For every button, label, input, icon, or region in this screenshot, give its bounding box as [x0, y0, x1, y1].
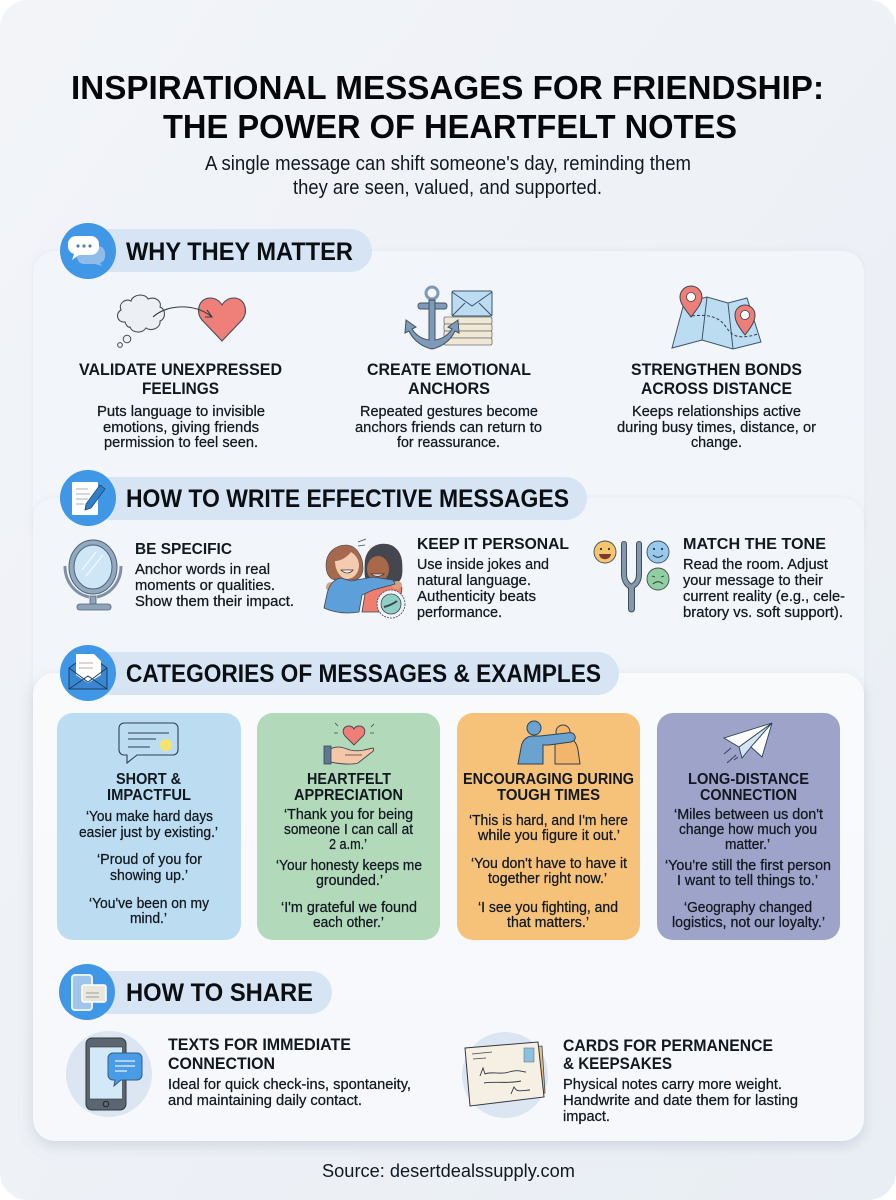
- card: heartfelt appreciation: APPRECIATION: [294, 787, 403, 804]
- card: long-distance connection: change how much you: [679, 822, 817, 838]
- column: validate unexpressed feelings: emotions, giving friends: [103, 420, 259, 436]
- title: THE POWER OF HEARTFELT NOTES: [163, 108, 737, 145]
- card: heartfelt appreciation: ‘Thank you for being: [284, 807, 413, 823]
- card: long-distance connection: I want to tell things to.’: [677, 873, 818, 889]
- share option: texts: CONNECTION: [168, 1054, 275, 1073]
- tip: be specific: Anchor words in real: [135, 562, 270, 578]
- card: heartfelt appreciation: someone I can call at: [284, 822, 413, 838]
- tip: keep it personal: KEEP IT PERSONAL: [417, 536, 569, 553]
- tip: match the tone: [594, 536, 845, 621]
- panel: why they matter: [33, 251, 864, 551]
- tip: match the tone: Read the room. Adjust: [683, 557, 828, 573]
- icon: message bubble: [119, 723, 178, 763]
- share option: texts: and maintaining daily contact.: [168, 1093, 362, 1109]
- tip: be specific: moments or qualities.: [135, 578, 275, 594]
- card: long-distance connection: CONNECTION: [700, 787, 797, 804]
- card: heartfelt appreciation: ‘I'm grateful we found: [281, 900, 417, 916]
- section header: how to write effective messages: HOW TO WRITE EFFECTIVE MESSAGES: [126, 485, 569, 513]
- icon: hand holding heart: [324, 723, 374, 764]
- card: encouraging during tough times: [457, 713, 640, 940]
- column: validate unexpressed feelings: Puts language to invisible: [97, 404, 265, 420]
- icon: paper plane: [724, 723, 772, 763]
- icon: mirror: [65, 540, 121, 610]
- card: long-distance connection: matter.’: [725, 837, 770, 853]
- share option: texts: Ideal for quick check-ins, spontaneity,: [168, 1077, 411, 1093]
- icon: phone and postcard: [72, 975, 106, 1010]
- tip: match the tone: MATCH THE TONE: [683, 536, 826, 553]
- card: encouraging during tough times: ENCOURAGING DURING: [463, 771, 634, 788]
- section header: how to share: HOW TO SHARE: [126, 979, 313, 1007]
- column: strengthen bonds across distance: STRENGTHEN BONDS: [631, 360, 802, 379]
- card: long-distance connection: ‘Miles between us don't: [674, 807, 823, 823]
- card: short and impactful: SHORT &: [116, 771, 181, 788]
- card: encouraging during tough times: together right now.’: [488, 871, 607, 887]
- section header: how to write effective messages: [60, 470, 587, 526]
- icon: supportive friends: [518, 721, 580, 764]
- tip: keep it personal: Authenticity beats: [417, 589, 536, 605]
- icon: thought cloud and heart: [118, 295, 245, 347]
- column: validate unexpressed feelings: [79, 295, 282, 451]
- column: validate unexpressed feelings: VALIDATE UNEXPRESSED: [79, 360, 282, 379]
- share option: cards: Physical notes carry more weight.: [563, 1077, 782, 1093]
- card: encouraging during tough times: ‘This is hard, and I'm here: [469, 813, 628, 829]
- card: long-distance connection: [657, 713, 840, 940]
- subtitle: A single message can shift someone's day, reminding them: [205, 153, 691, 175]
- share option: cards: [462, 1032, 798, 1125]
- column: create emotional anchors: Repeated gestures become: [360, 404, 538, 420]
- card: long-distance connection: ‘Geography changed: [684, 900, 812, 916]
- icon: chat bubbles: [68, 236, 105, 266]
- card: long-distance connection: logistics, not our loyalty.’: [672, 915, 825, 931]
- card: short and impactful: ‘You've been on my: [89, 896, 210, 912]
- card: heartfelt appreciation: 2 a.m.’: [329, 837, 367, 853]
- card: short and impactful: mind.’: [130, 911, 167, 927]
- tip: be specific: BE SPECIFIC: [135, 541, 232, 558]
- share option: cards: impact.: [563, 1109, 610, 1125]
- subtitle: they are seen, valued, and supported.: [293, 177, 602, 199]
- card: encouraging during tough times: ‘I see you fighting, and: [478, 900, 618, 916]
- icon: envelope with letter: [69, 654, 107, 689]
- section header: categories of messages and examples: [60, 645, 619, 701]
- share option: cards: & KEEPSAKES: [563, 1054, 672, 1073]
- card: short and impactful: [57, 713, 241, 940]
- column: strengthen bonds across distance: during busy times, distance, or: [617, 420, 816, 436]
- tip: match the tone: current reality (e.g., cele-: [683, 589, 845, 605]
- card: heartfelt appreciation: each other.’: [313, 915, 384, 931]
- tip: keep it personal: [324, 536, 569, 621]
- tip: be specific: [65, 540, 294, 610]
- tip: keep it personal: Use inside jokes and: [417, 557, 549, 573]
- title: INSPIRATIONAL MESSAGES FOR FRIENDSHIP:: [71, 69, 824, 106]
- tip: keep it personal: natural language.: [417, 573, 531, 589]
- card: short and impactful: IMPACTFUL: [107, 787, 191, 804]
- icon: tuning fork and faces: [594, 541, 669, 609]
- share option: texts: TEXTS FOR IMMEDIATE: [168, 1035, 351, 1054]
- column: validate unexpressed feelings: FEELINGS: [142, 379, 219, 398]
- share option: cards: CARDS FOR PERMANENCE: [563, 1036, 773, 1055]
- column: create emotional anchors: ANCHORS: [408, 379, 490, 398]
- column: strengthen bonds across distance: change.: [691, 435, 742, 451]
- tip: match the tone: bratory vs. soft support).: [683, 605, 843, 621]
- column: strengthen bonds across distance: ACROSS DISTANCE: [641, 379, 792, 398]
- column: validate unexpressed feelings: permission to feel seen.: [104, 435, 258, 451]
- card: encouraging during tough times: ‘You don't have to have it: [471, 856, 627, 872]
- share option: cards: Handwrite and date them for lasting: [563, 1093, 798, 1109]
- section header: how to share: [59, 964, 332, 1020]
- source line: Source: desertdealssupply.com: [322, 1161, 575, 1181]
- panel: how to write: [33, 498, 864, 728]
- card: encouraging during tough times: TOUGH TIMES: [497, 787, 600, 804]
- card: short and impactful: showing up.’: [110, 868, 188, 884]
- section header: why they matter: WHY THEY MATTER: [126, 238, 353, 266]
- subtitle: [205, 153, 691, 199]
- column: create emotional anchors: for reassurance.: [397, 435, 500, 451]
- card: heartfelt appreciation: HEARTFELT: [307, 771, 391, 788]
- section header: why they matter: [60, 223, 372, 279]
- tip: match the tone: your message to their: [683, 573, 823, 589]
- column: create emotional anchors: CREATE EMOTIONAL: [367, 360, 531, 379]
- card: encouraging during tough times: that matters.’: [507, 915, 589, 931]
- icon: note and pen: [72, 482, 105, 515]
- card: short and impactful: ‘Proud of you for: [97, 852, 202, 868]
- tip: be specific: Show them their impact.: [135, 594, 294, 610]
- icon: phone with message: [66, 1031, 152, 1117]
- icon: anchor with envelope and letters: [405, 287, 492, 349]
- column: strengthen bonds across distance: [617, 286, 816, 451]
- icon: map with pins: [672, 286, 761, 349]
- panel: categories and sharing: [33, 673, 864, 1141]
- card: heartfelt appreciation: ‘Your honesty keeps me: [276, 858, 422, 874]
- section header: categories of messages and examples: CATEGORIES OF MESSAGES & EXAMPLES: [126, 660, 601, 688]
- icon: postcard: [462, 1032, 548, 1118]
- card: long-distance connection: ‘You're still the first person: [665, 858, 831, 874]
- column: create emotional anchors: [355, 287, 542, 451]
- title: [71, 69, 824, 145]
- card: long-distance connection: LONG-DISTANCE: [688, 771, 809, 788]
- icon: two friends with badge: [324, 539, 405, 618]
- card: heartfelt appreciation: [257, 713, 440, 940]
- share option: texts: [66, 1031, 411, 1117]
- card: encouraging during tough times: while you figure it out.’: [477, 828, 620, 844]
- tip: keep it personal: performance.: [417, 605, 502, 621]
- column: strengthen bonds across distance: Keeps relationships active: [632, 404, 801, 420]
- column: create emotional anchors: anchors friends can return to: [355, 420, 542, 436]
- card: short and impactful: ‘You make hard days: [86, 809, 213, 825]
- card: heartfelt appreciation: grounded.’: [316, 873, 383, 889]
- card: short and impactful: easier just by existing.’: [79, 825, 218, 841]
